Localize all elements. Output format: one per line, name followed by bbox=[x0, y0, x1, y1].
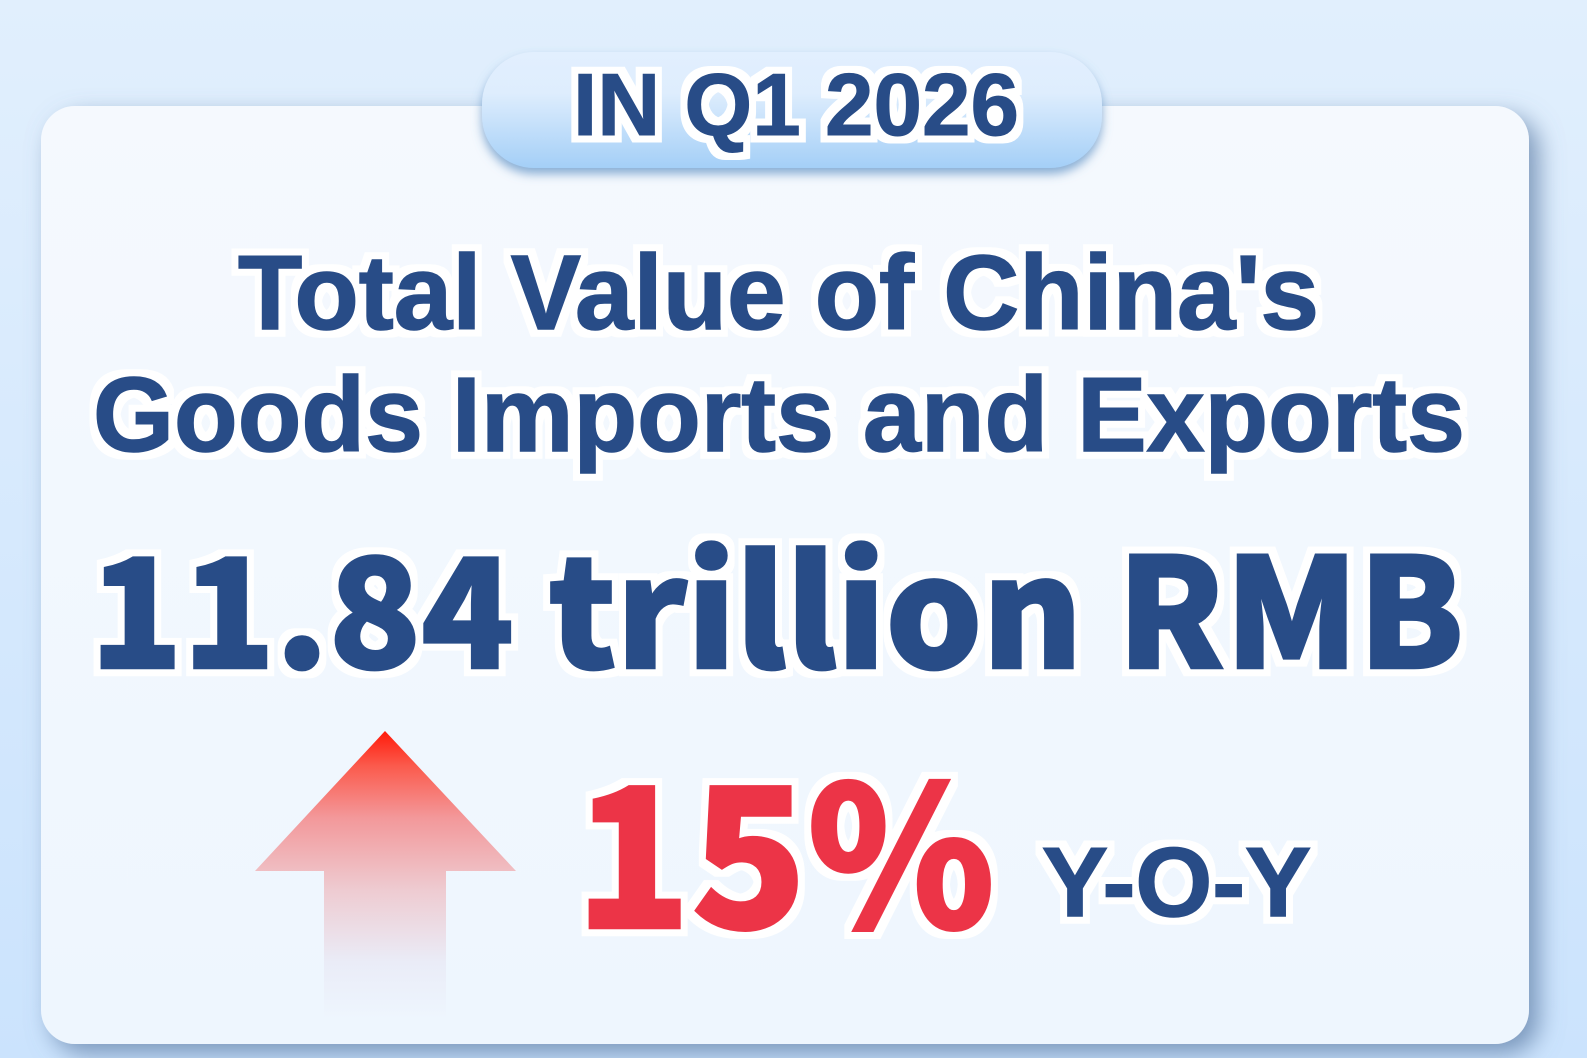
title bbox=[93, 234, 1465, 474]
date badge bbox=[482, 52, 1102, 168]
title line 1: Total Value of China's bbox=[238, 234, 1319, 352]
title line 2: Goods Imports and Exports bbox=[93, 356, 1465, 474]
headline figure: 11.84 trillion RMB bbox=[90, 492, 1464, 712]
growth label: Y-O-Y bbox=[1042, 827, 1311, 937]
badge text: IN Q1 2026 bbox=[573, 55, 1019, 154]
growth percentage: 15% bbox=[575, 703, 995, 985]
badge pill bbox=[482, 52, 1102, 168]
icon: upward arrow bbox=[255, 731, 516, 1026]
